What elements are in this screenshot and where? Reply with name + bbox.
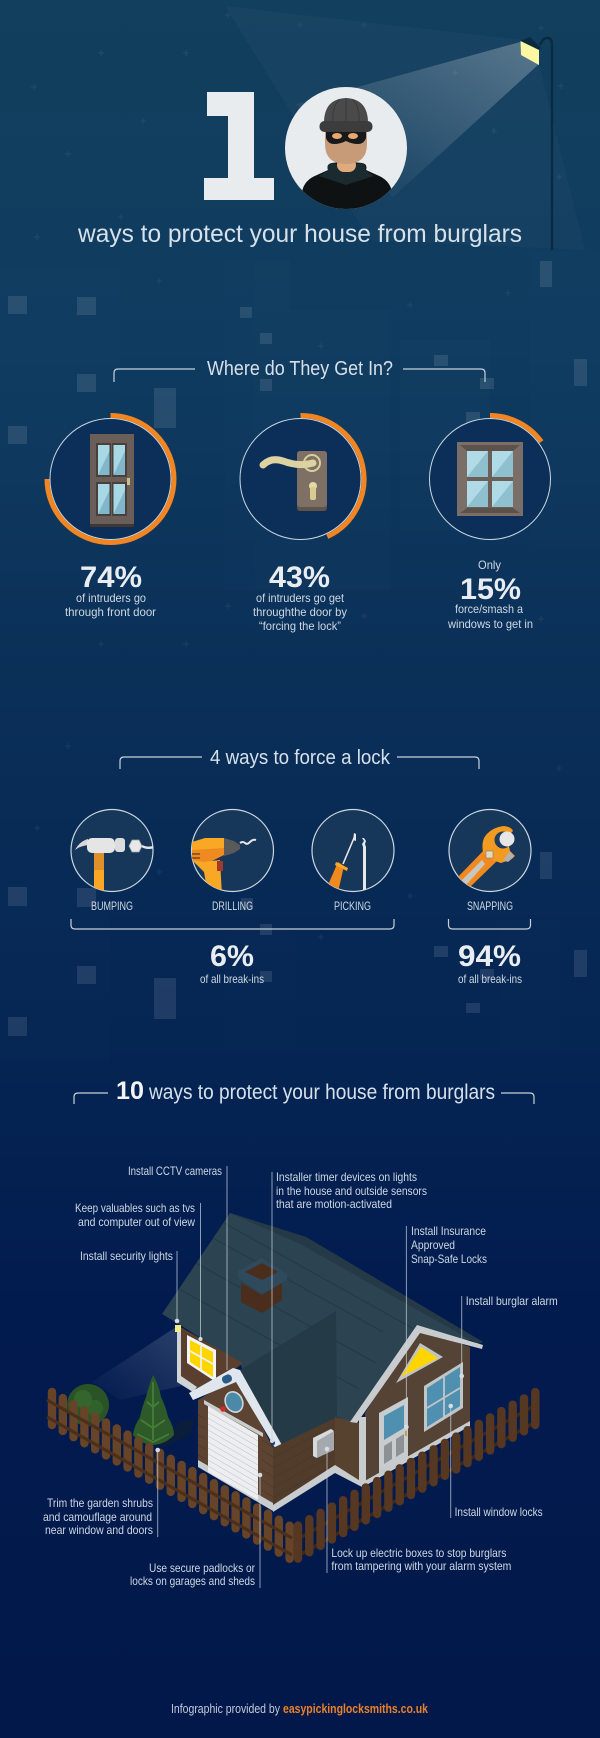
- icon: wrench snapping: [449, 810, 531, 892]
- callout: timer devices: that are motion-activated: [276, 1197, 392, 1211]
- burglar portrait circle: [285, 87, 407, 212]
- callout: CCTV cameras: Install CCTV cameras: [128, 1164, 222, 1178]
- section: 4 ways to force a lock: [71, 747, 531, 986]
- section heading: 10 ways to protect your house: [74, 1077, 534, 1105]
- stat text: Only: [478, 558, 501, 572]
- callout: padlocks: [130, 1473, 262, 1588]
- heading: 4 ways to force a lock: [210, 747, 391, 769]
- stat text: of intruders go get: [256, 591, 345, 605]
- callout: padlocks: Use secure padlocks or: [149, 1561, 255, 1575]
- title number 10 with burglar portrait: [204, 87, 407, 212]
- stat text: of intruders go: [76, 591, 146, 605]
- icon: small sensor: [271, 1441, 275, 1445]
- callout: snap-safe locks: Approved: [411, 1238, 455, 1252]
- tool labels: DRILLING: [212, 899, 253, 913]
- garage wall: [198, 1377, 273, 1511]
- gable wall: [350, 1325, 483, 1487]
- stat text: through front door: [65, 605, 156, 619]
- stat text: windows to get in: [447, 617, 533, 631]
- tree shadow: [155, 1418, 195, 1447]
- front wall: [273, 1417, 362, 1512]
- callout: timer devices: [270, 1170, 427, 1443]
- callout: snap-safe locks: [404, 1224, 487, 1429]
- numeral one: [204, 92, 274, 200]
- callouts: [43, 1164, 558, 1588]
- callout: valuables: Keep valuables such as tvs: [75, 1201, 195, 1215]
- security light beam: [92, 1327, 185, 1400]
- gable trim: [189, 1368, 283, 1451]
- callout: security lights: [80, 1249, 179, 1323]
- callout: garden shrubs: [43, 1448, 160, 1537]
- street lamp with light beam: [225, 6, 585, 250]
- stat text: 15%: [460, 573, 521, 606]
- section heading: 10 ways to protect your house: 10: [116, 1077, 144, 1105]
- door stat ring 74%: [47, 415, 174, 619]
- footer credit: Infographic provided by: [171, 1702, 281, 1716]
- section heading: 10 ways to protect your house: ways to protect your house from burglars: [148, 1081, 495, 1104]
- bush: [67, 1384, 109, 1426]
- callout: garden shrubs: and camouflage around: [43, 1510, 152, 1524]
- icon: round window: [222, 1389, 246, 1415]
- tool labels: BUMPING: [91, 899, 133, 913]
- icon: security light: [175, 1325, 181, 1332]
- callout: window locks: Install window locks: [455, 1505, 543, 1519]
- chimney: [238, 1258, 287, 1313]
- callout: snap-safe locks: Snap-Safe Locks: [411, 1252, 487, 1266]
- stat text: [65, 561, 156, 619]
- city silhouette and lit windows: [0, 12, 600, 1060]
- callout: valuables: [75, 1201, 202, 1341]
- lock stat ring 43%: [240, 415, 364, 633]
- section: where do they get in: [47, 358, 550, 633]
- callout: padlocks: locks on garages and sheds: [130, 1574, 255, 1588]
- icon: electric box: [313, 1429, 334, 1458]
- stat text: [447, 558, 533, 631]
- tool labels: PICKING: [334, 899, 371, 913]
- callout: garden shrubs: Trim the garden shrubs: [47, 1496, 153, 1510]
- callout: burglar alarm: [459, 1294, 558, 1378]
- tool labels: [91, 899, 513, 913]
- upper side wall: [175, 1325, 243, 1398]
- side window: [424, 1362, 463, 1432]
- icon: alarm sensor: [220, 1406, 226, 1412]
- footer credit: [171, 1702, 428, 1716]
- stat: 6% of all break-ins: of all break-ins: [200, 972, 264, 986]
- triangular attic window: [396, 1343, 443, 1383]
- callout: burglar alarm: Install burglar alarm: [466, 1294, 558, 1308]
- icon: door: [90, 434, 134, 527]
- callout: valuables: and computer out of view: [78, 1215, 195, 1229]
- icon: door handle: [263, 451, 327, 511]
- callout: security lights: Install security lights: [80, 1249, 173, 1263]
- icon: hammer and key bumping: [71, 810, 154, 893]
- window stat ring 15%: [430, 416, 550, 631]
- tree: [133, 1375, 174, 1445]
- stat: 6% of all break-ins: [71, 919, 394, 986]
- icon: window: [457, 442, 523, 516]
- stat: 6% of all break-ins: 6%: [210, 940, 254, 973]
- stat: 94% of all break-ins: [448, 919, 530, 986]
- lit window: [187, 1335, 216, 1382]
- left fence: [47, 1392, 292, 1559]
- stat text: “forcing the lock”: [259, 619, 341, 633]
- icon: cctv camera: [221, 1373, 233, 1385]
- subtitle: ways to protect your house from burglars: [77, 220, 522, 248]
- roof: [162, 1213, 483, 1448]
- front door: [379, 1397, 408, 1473]
- heading: Where do They Get In?: [207, 358, 393, 380]
- callout: electric boxes: [325, 1447, 511, 1573]
- tool labels: SNAPPING: [467, 899, 513, 913]
- stat text: 43%: [269, 561, 330, 594]
- stat: 94% of all break-ins: of all break-ins: [458, 972, 522, 986]
- callout: window locks: [448, 1404, 543, 1519]
- footer credit: easypickinglocksmiths.co.uk: [283, 1702, 428, 1716]
- stat text: force/smash a: [455, 602, 523, 616]
- garage door: [208, 1406, 258, 1500]
- callout: timer devices: Installer timer devices on lights: [276, 1170, 417, 1184]
- callout: snap-safe locks: Install Insurance: [411, 1224, 486, 1238]
- icon: screwdriver and pick: [312, 810, 394, 892]
- stat text: throughthe door by: [253, 605, 347, 619]
- icon: drill: [192, 810, 274, 895]
- stat text: [253, 561, 347, 633]
- house illustration: [47, 1213, 535, 1559]
- stat: 94% of all break-ins: 94%: [458, 940, 521, 973]
- stat text: 74%: [80, 561, 142, 594]
- callout: timer devices: in the house and outside sensors: [276, 1184, 427, 1198]
- callout: garden shrubs: near window and doors: [45, 1523, 153, 1537]
- callout: electric boxes: from tampering with your alarm system: [331, 1559, 511, 1573]
- right fence: [296, 1392, 535, 1559]
- callout: electric boxes: Lock up electric boxes to stop burglars: [331, 1546, 506, 1560]
- heading: [114, 358, 485, 382]
- heading: [120, 747, 479, 769]
